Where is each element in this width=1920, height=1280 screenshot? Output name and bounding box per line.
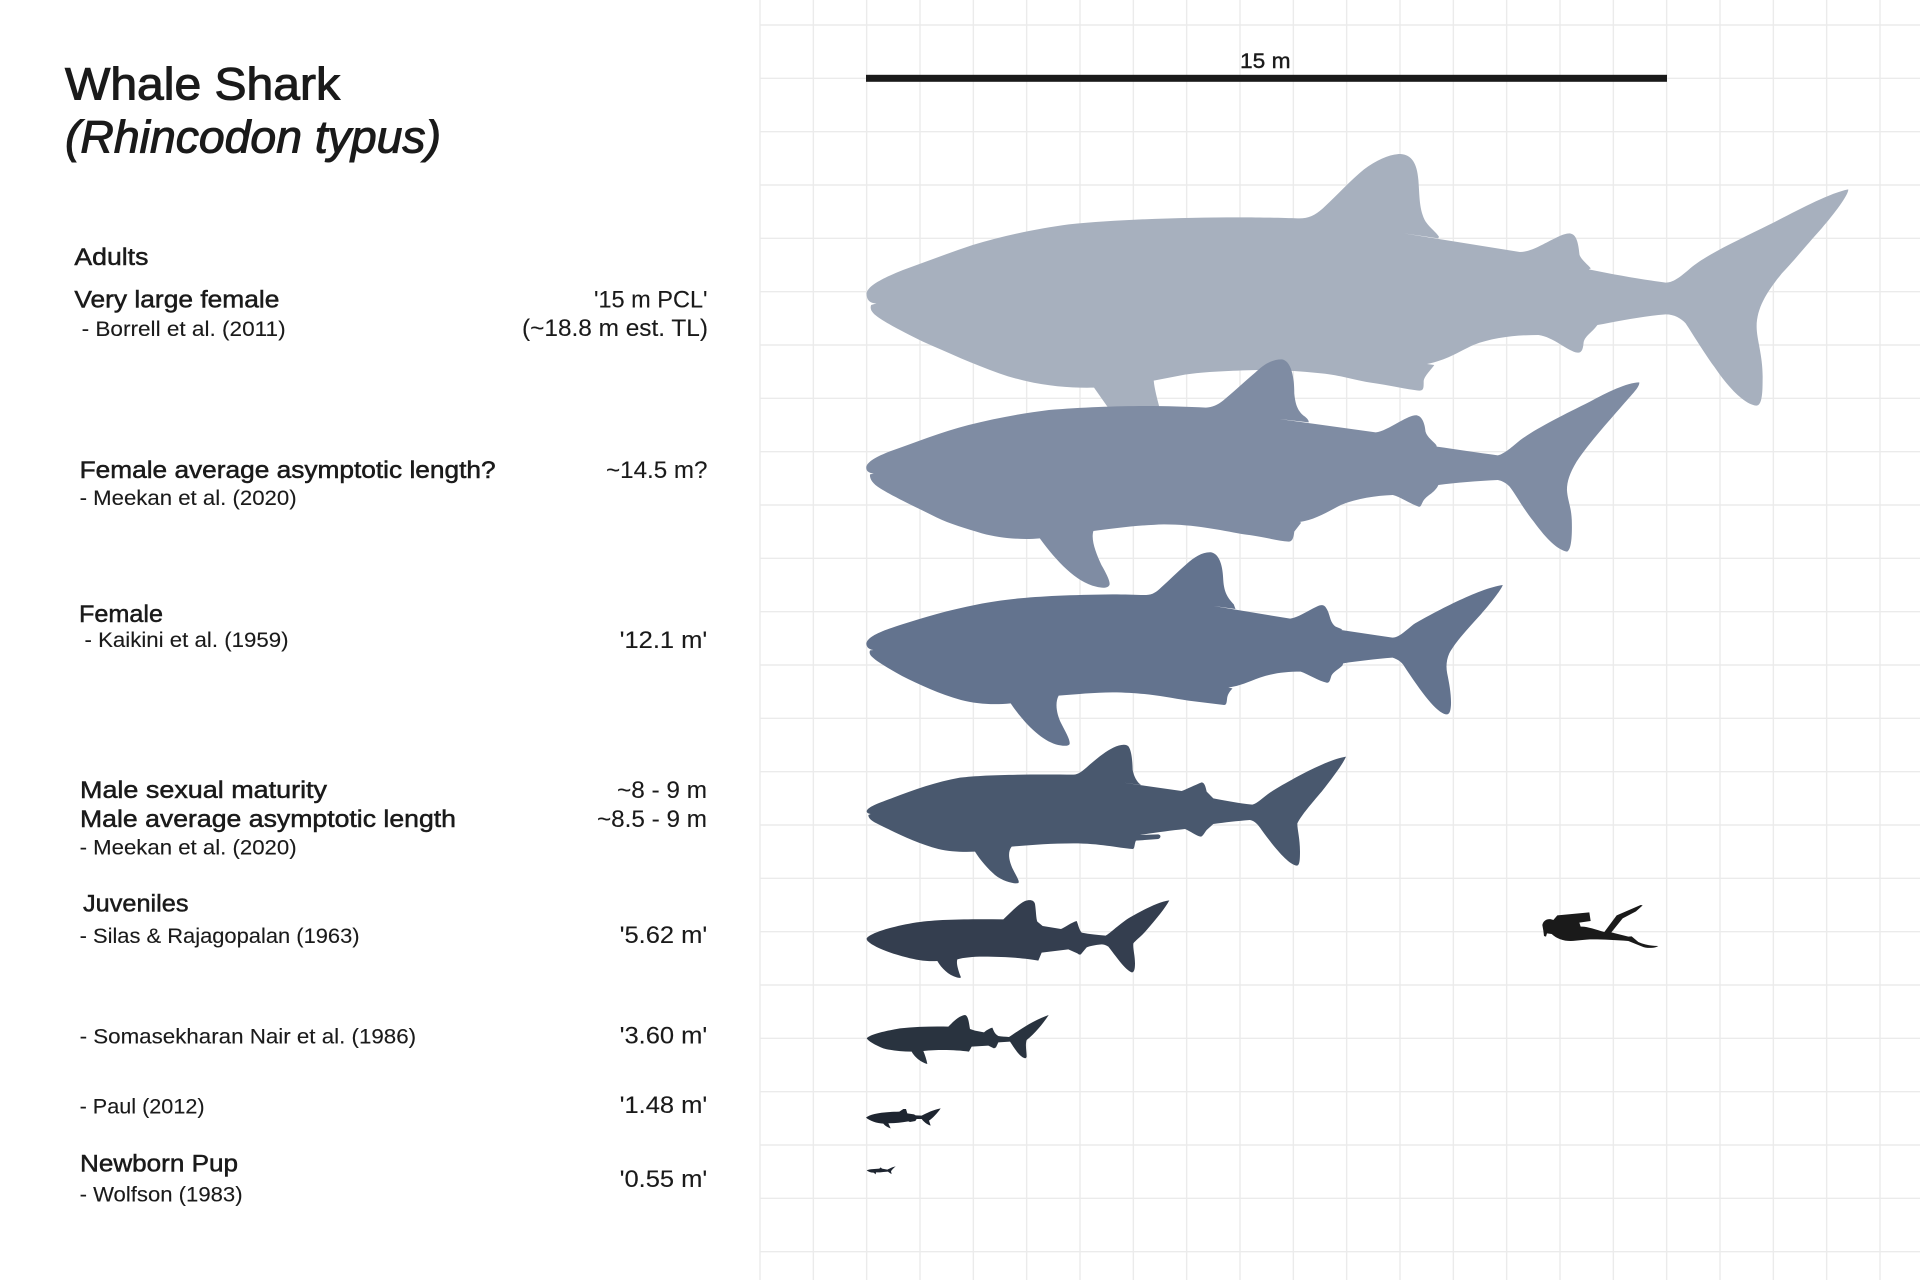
entry: very large female <box>74 287 708 342</box>
entry: female average asymptotic length <box>80 457 708 510</box>
entry: Silas and Rajagopalan: '5.62 m' <box>620 922 707 949</box>
entry: newborn pup: Newborn Pup <box>80 1151 238 1178</box>
entry: female: - Kaikini et al. (1959) <box>84 629 288 652</box>
entry: Paul: - Paul (2012) <box>80 1096 205 1118</box>
entry: male maturity: ~8 - 9 m <box>617 777 707 804</box>
entry: Somasekharan Nair: '3.60 m' <box>620 1022 707 1050</box>
entry: Somasekharan Nair: - Somasekharan Nair et al. (1986) <box>80 1026 416 1048</box>
entry: very large female: - Borrell et al. (2011) <box>82 318 286 341</box>
scale bar <box>866 50 1667 82</box>
entry: newborn pup: - Wolfson (1983) <box>80 1184 243 1207</box>
entry: very large female: '15 m PCL' <box>594 287 708 314</box>
title <box>65 58 441 163</box>
entry: Paul <box>80 1092 707 1119</box>
entry: Silas and Rajagopalan <box>80 922 707 949</box>
entry: very large female: Very large female <box>74 287 279 314</box>
scale bar: 15 m <box>1240 50 1290 73</box>
entry: male maturity: Male sexual maturity <box>80 777 327 804</box>
silhouette: 18.8 m very large female <box>867 154 1848 408</box>
silhouette: 1.48 m juvenile <box>866 1108 941 1128</box>
entry: newborn pup <box>80 1151 707 1207</box>
icon: human diver for scale <box>1542 905 1658 948</box>
entry: male maturity: - Meekan et al. (2020) <box>80 836 297 860</box>
silhouette: 3.60 m juvenile <box>867 1015 1049 1064</box>
entry: female: '12.1 m' <box>620 627 707 654</box>
silhouette: 14.5 m female <box>866 359 1639 588</box>
silhouette: 12.1 m female <box>866 552 1503 746</box>
entry: newborn pup: '0.55 m' <box>620 1166 707 1193</box>
entry: female average asymptotic length: ~14.5 m? <box>606 457 708 484</box>
entry: Paul: '1.48 m' <box>620 1092 707 1119</box>
silhouette: 9 m male <box>867 745 1346 883</box>
entry: Silas and Rajagopalan: - Silas & Rajagopalan (1963) <box>80 925 360 948</box>
entry: male maturity <box>80 777 707 860</box>
entry: male maturity: Male average asymptotic length <box>80 806 456 833</box>
entry: female average asymptotic length: - Meekan et al. (2020) <box>80 487 297 510</box>
heading: juveniles: Juveniles <box>83 891 188 918</box>
entry: male maturity: ~8.5 - 9 m <box>597 806 707 833</box>
entry: Somasekharan Nair <box>80 1022 707 1050</box>
title: (Rhincodon typus) <box>65 112 441 163</box>
heading: adults: Adults <box>74 244 148 271</box>
entry: female <box>79 601 707 654</box>
silhouette: 0.55 m newborn pup <box>867 1166 896 1174</box>
title: Whale Shark <box>65 58 341 109</box>
silhouette: 5.62 m juvenile <box>867 900 1169 978</box>
entry: female: Female <box>79 601 163 628</box>
entry: very large female: (~18.8 m est. TL) <box>522 315 708 342</box>
entry: female average asymptotic length: Female average asymptotic length? <box>80 457 496 484</box>
